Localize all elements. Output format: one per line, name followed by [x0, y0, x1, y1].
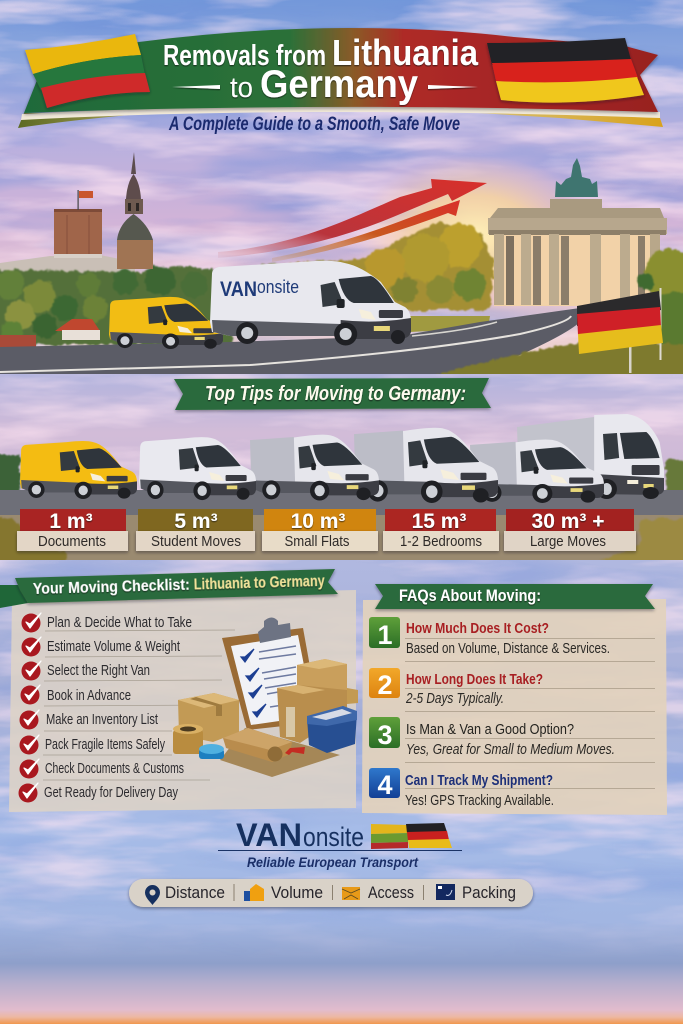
- lower background sky: [0, 560, 683, 1024]
- checklist item 2: Estimate Volume & Weight: [47, 639, 180, 655]
- header ribbon: [18, 28, 663, 135]
- floor board: [220, 728, 340, 777]
- lower gold stripe: [18, 105, 663, 128]
- checklist item 6: Pack Fragile Items Safely: [45, 737, 166, 753]
- stacked cardboard boxes: [277, 659, 358, 743]
- red tape dispenser: [285, 747, 305, 755]
- title: Removals from: [163, 40, 326, 72]
- white VANonsite van: [210, 261, 411, 346]
- illustration: clipboard and boxes: [173, 618, 358, 777]
- section: top tips and van sizes: [0, 374, 683, 570]
- title: Lithuania: [332, 32, 479, 73]
- FAQ parchment: [362, 599, 667, 815]
- distant hills and trees left: [0, 265, 232, 345]
- red arrow from Lithuania to Germany: [218, 179, 487, 262]
- FAQ 2: 2: [377, 670, 393, 700]
- clipboard: [222, 618, 320, 730]
- landmark: Gediminas tower: [54, 190, 102, 258]
- footer logo: [218, 817, 462, 870]
- roadside bushes: [0, 518, 683, 570]
- left cardboard box: [178, 693, 239, 742]
- van size 2: [139, 437, 256, 500]
- FAQ 3: 3: [377, 720, 393, 750]
- checklist item 4: Book in Advance: [47, 688, 131, 704]
- size card: 30 m3+: [504, 509, 636, 551]
- subtitle: A Complete Guide to a Smooth, Safe Move: [168, 114, 460, 135]
- landmark: Vilnius castle hill wall: [0, 255, 135, 275]
- size card: 15 m3: 1-2 Bedrooms: [400, 533, 482, 550]
- background sky: header and hero: [0, 0, 683, 375]
- factor: access: Access: [368, 883, 414, 902]
- size card: 10 m3: [262, 509, 378, 551]
- FAQ 4: Can I Track My Shipment?: [405, 773, 553, 789]
- FAQ 2: [369, 668, 543, 707]
- factor: packing: [436, 883, 516, 902]
- packing tape roll: [173, 724, 203, 754]
- van size 1: yellow: [20, 441, 137, 499]
- van size 6: truck: [517, 414, 664, 499]
- blue tape roll: [199, 744, 224, 759]
- checklist item 5: [20, 710, 158, 730]
- landmark: cathedral tower: [117, 152, 153, 269]
- hero scene: [0, 152, 683, 385]
- footer factors pill: [129, 879, 533, 907]
- mini flags: [371, 823, 452, 849]
- size card: 5 m3: Student Moves: [151, 533, 241, 550]
- checklist item 2: [22, 637, 180, 656]
- sunset glow: [355, 155, 595, 315]
- heading banner: checklist: [0, 569, 338, 608]
- checklist item 1: Plan & Decide What to Take: [47, 615, 192, 631]
- checklist item 7: Check Documents & Customs: [45, 761, 184, 777]
- quadriga statue: [555, 158, 598, 197]
- FAQ 4: Yes! GPS Tracking Available.: [405, 793, 554, 809]
- title: to: [230, 72, 253, 104]
- size card: 10 m3: Small Flats: [284, 533, 350, 550]
- checklist item 3: Select the Right Van: [47, 663, 150, 679]
- heading banner: FAQs: [375, 584, 655, 609]
- road strip: [0, 490, 683, 516]
- red roof house: [0, 319, 100, 347]
- grass strip: [400, 316, 490, 332]
- van size 4: [354, 428, 498, 503]
- landmark: Brandenburg Gate: [488, 158, 667, 306]
- rolled cardboard: [223, 728, 292, 762]
- trees right of gate: [637, 249, 683, 348]
- German flag on pole: [577, 288, 663, 373]
- heading banner: top tips: [174, 378, 491, 410]
- heading banner: checklist: Lithuania to Germany: [194, 573, 325, 594]
- size card: 30 m3+: Large Moves: [530, 533, 606, 550]
- factor: volume: [244, 883, 323, 902]
- pill background: [129, 879, 533, 907]
- heading banner: top tips: Top Tips for Moving to Germany:: [205, 383, 466, 405]
- German flag in ribbon: [487, 38, 644, 103]
- size card: 15 m3: 15 m³: [412, 510, 466, 533]
- checklist dividers: [43, 630, 235, 780]
- heading banner: FAQs: FAQs About Moving:: [399, 586, 541, 605]
- van size 3: [250, 435, 379, 501]
- factor: volume: Volume: [271, 883, 323, 902]
- checklist item 5: Make an Inventory List: [46, 712, 158, 728]
- checklist item 1: [22, 613, 192, 632]
- yellow van: [109, 297, 223, 349]
- distant trees: [0, 455, 683, 494]
- autumn trees: [235, 222, 494, 310]
- logo wordmark: VAN: [236, 817, 302, 853]
- van logo: VAN: [220, 278, 257, 301]
- checklist item 3: [22, 661, 150, 680]
- logo wordmark: onsite: [303, 822, 364, 852]
- heading banner: checklist: Your Moving Checklist:: [33, 577, 190, 598]
- checklist item 6: [20, 735, 166, 754]
- title: [163, 32, 479, 106]
- white VANonsite van: onsite: [257, 277, 299, 297]
- logo rule: [218, 850, 462, 851]
- logo wordmark: [236, 817, 364, 853]
- van size 5: [470, 440, 604, 503]
- size card: 10 m3: 10 m³: [291, 510, 345, 533]
- size card: 30 m3+: 30 m³ +: [532, 510, 604, 533]
- white stripe: [21, 106, 660, 120]
- title: Germany: [260, 63, 418, 106]
- main ribbon body: [24, 28, 658, 113]
- size card: 1 m3: [17, 509, 128, 551]
- pill separators: [234, 884, 424, 901]
- factor: distance: [145, 883, 225, 905]
- blue box: [307, 706, 357, 753]
- checklist item 7: [20, 759, 184, 778]
- FAQ 1: Based on Volume, Distance & Services.: [406, 641, 610, 657]
- FAQ 1: How Much Does It Cost?: [406, 621, 549, 637]
- FAQ 1: [369, 617, 610, 657]
- size card: 5 m3: [136, 509, 255, 551]
- checklist item 8: Get Ready for Delivery Day: [44, 785, 179, 801]
- FAQ 3: [369, 717, 615, 758]
- checklist parchment: [9, 590, 356, 812]
- FAQ 3: Yes, Great for Small to Medium Moves.: [406, 742, 615, 758]
- Lithuanian flag: [25, 34, 150, 108]
- FAQ 3: Is Man & Van a Good Option?: [406, 722, 574, 738]
- FAQ 1: 1: [377, 620, 393, 650]
- FAQ 2: How Long Does It Take?: [406, 672, 543, 688]
- ground strip: [0, 515, 683, 563]
- factor: access: [342, 883, 414, 902]
- factor: distance: Distance: [165, 883, 225, 902]
- panel: FAQs: [362, 584, 667, 815]
- size card: 1 m3: 1 m³: [49, 510, 93, 533]
- size card: 15 m3: [383, 509, 499, 551]
- FAQ 4: 4: [377, 770, 393, 800]
- road: [0, 308, 580, 385]
- tagline: Reliable European Transport: [247, 854, 419, 870]
- section sky: [0, 374, 683, 492]
- FAQ 2: 2-5 Days Typically.: [405, 691, 504, 707]
- FAQ dividers: [405, 638, 655, 788]
- checklist item 4: [20, 685, 131, 704]
- roadside shrubs: [438, 340, 683, 378]
- checklist item 8: [18, 783, 179, 802]
- size card: 5 m3: 5 m³: [174, 510, 218, 533]
- panel: moving checklist: [0, 569, 358, 812]
- factor: packing: Packing: [462, 883, 516, 902]
- FAQ 4: [369, 768, 554, 809]
- size card: 1 m3: Documents: [38, 533, 106, 550]
